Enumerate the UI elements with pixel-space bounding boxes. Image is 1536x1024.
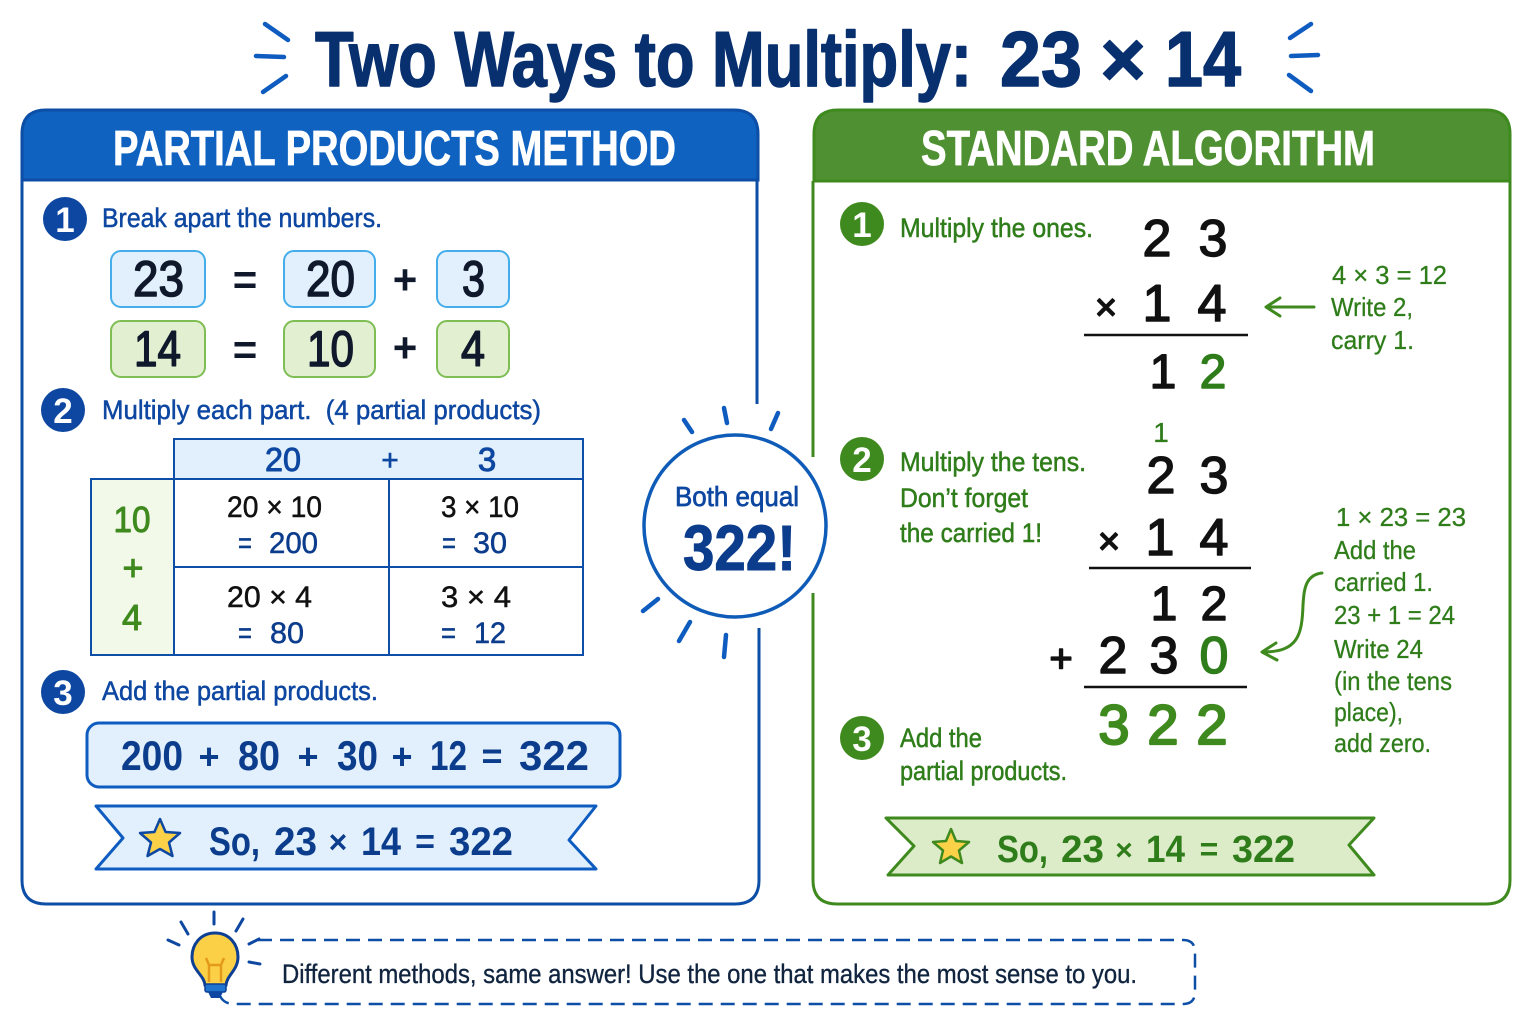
arrow: to ones note <box>1266 298 1314 316</box>
area model table <box>91 439 583 655</box>
sum box <box>87 723 620 787</box>
result text: 23 <box>1061 829 1104 871</box>
step 3 badge <box>840 716 884 760</box>
result text: 322 <box>1232 829 1295 871</box>
worked multiplication: ones: 1 <box>1143 275 1171 333</box>
step 3 text: partial products. <box>900 756 1067 786</box>
area model table: = <box>238 617 252 650</box>
worked multiplication: tens and total <box>1049 417 1251 756</box>
panel outline <box>813 181 1510 904</box>
worked multiplication: tens and total: 2 <box>1201 578 1227 631</box>
arrow: curved to tens row <box>1262 573 1322 660</box>
result text: 322 <box>449 820 513 864</box>
step 3 text <box>900 723 1067 786</box>
tip box <box>220 940 1195 1004</box>
area model table: 4 <box>122 597 142 638</box>
callout: both equal 322: Both equal <box>675 481 799 512</box>
step 1 text: Break apart the numbers. <box>102 203 382 233</box>
worked multiplication: tens and total: 2 <box>1147 693 1179 756</box>
result text: = <box>1200 831 1218 867</box>
step 1 badge <box>840 202 884 246</box>
area model table: 30 <box>473 527 507 560</box>
number boxes: 23 row: = <box>233 256 257 303</box>
number boxes: 14 row: 10 <box>307 321 354 377</box>
worked multiplication: tens and total: 3 <box>1150 627 1178 685</box>
step 2 badge: 2 <box>53 392 73 431</box>
sum box: 30 <box>337 732 378 779</box>
panel header: blue <box>22 110 758 180</box>
step 1 badge: 1 <box>852 206 872 245</box>
area model table: + <box>122 547 144 588</box>
worked multiplication: tens and total: 0 <box>1200 627 1228 685</box>
step 3 badge: 3 <box>53 674 73 713</box>
sum box: + <box>391 736 413 777</box>
note: tens <box>1334 502 1466 758</box>
area model table: + <box>381 444 399 477</box>
step 3 badge: 3 <box>852 720 872 759</box>
result text <box>209 820 513 864</box>
step 2 badge <box>41 388 85 432</box>
worked multiplication: ones: 2 <box>1200 346 1226 399</box>
icon: title sparks left <box>256 24 288 92</box>
callout: both equal 322 <box>644 435 826 617</box>
area model table: 3 × 10 <box>441 491 519 524</box>
result ribbon <box>96 806 596 869</box>
worked multiplication: ones: 4 <box>1198 275 1226 333</box>
number boxes: 14 row: + <box>393 324 417 371</box>
step 2 text <box>900 447 1086 548</box>
step 1 badge: 1 <box>55 201 75 240</box>
area model table: 200 <box>269 527 318 560</box>
note: tens: place), <box>1334 697 1403 727</box>
sum box: 12 <box>430 732 467 779</box>
worked multiplication: tens and total: 1 <box>1151 578 1177 631</box>
area model table: 3 × 4 <box>441 581 511 614</box>
panel header: green <box>814 110 1510 181</box>
panel: standard algorithm <box>813 110 1510 904</box>
step 2 text: Don’t forget <box>900 483 1028 513</box>
step 1 text: Multiply the ones. <box>900 213 1093 243</box>
number boxes: 14 row: = <box>233 326 257 373</box>
icon: star <box>140 819 180 856</box>
step 1 badge <box>43 197 87 241</box>
note: tens: 23 + 1 = 24 <box>1334 600 1455 630</box>
step 3 text: Add the partial products. <box>102 676 378 706</box>
note: ones <box>1331 260 1447 355</box>
heading: PARTIAL PRODUCTS METHOD <box>113 122 676 176</box>
area model table: 20 <box>265 441 301 478</box>
note: ones: 4 × 3 = 12 <box>1332 260 1447 290</box>
area model table: = <box>442 527 456 560</box>
note: tens: (in the tens <box>1334 666 1452 696</box>
number boxes: 14 row <box>111 321 509 377</box>
worked multiplication: ones <box>1084 210 1248 399</box>
worked multiplication: tens and total: 2 <box>1099 627 1127 685</box>
area model table: 20 × 10 <box>227 491 322 524</box>
step 2 badge <box>840 437 884 481</box>
worked multiplication: tens and total: + <box>1049 637 1073 681</box>
number boxes: 23 row: 23 <box>133 251 184 307</box>
number boxes: 14 row: 14 <box>134 321 181 377</box>
worked multiplication: tens and total: 2 <box>1147 447 1175 505</box>
panel: partial products method <box>22 110 759 904</box>
step 2 text: the carried 1! <box>900 518 1042 548</box>
number boxes: 23 row: 20 <box>306 251 355 307</box>
title: 14 <box>1165 15 1241 103</box>
title: Two Ways to Multiply: <box>315 15 972 103</box>
result text: So, <box>209 820 260 864</box>
title: 23 <box>1000 15 1082 103</box>
worked multiplication: tens and total: 4 <box>1200 509 1228 567</box>
area model table: 10 <box>114 499 150 540</box>
area model table: 3 <box>478 441 496 478</box>
step 3 badge <box>41 670 85 714</box>
number boxes: 23 row: 3 <box>462 251 485 307</box>
worked multiplication: tens and total: 3 <box>1200 447 1228 505</box>
icon: light bulb <box>168 912 260 998</box>
sum box: 80 <box>238 732 280 779</box>
area model table: 12 <box>474 617 506 650</box>
callout: both equal 322: 322! <box>683 512 796 584</box>
area model table: = <box>441 617 456 650</box>
worked multiplication: ones: 3 <box>1199 210 1227 268</box>
result text: × <box>1115 834 1133 867</box>
note: tens: Add the <box>1334 535 1416 565</box>
sum box: 322 <box>519 732 589 779</box>
step 2 badge: 2 <box>852 441 872 480</box>
result text: 14 <box>1146 829 1185 871</box>
worked multiplication: ones: × <box>1095 287 1117 329</box>
note: ones: Write 2, <box>1331 292 1413 322</box>
heading: STANDARD ALGORITHM <box>921 122 1375 176</box>
icon: title sparks right <box>1289 24 1318 91</box>
result text: So, <box>997 829 1048 871</box>
sum box: = <box>481 735 503 776</box>
worked multiplication: tens and total: 1 <box>1146 509 1174 567</box>
area model table: = <box>238 527 252 560</box>
icon: callout sparks <box>643 408 778 657</box>
result text: × <box>329 824 347 860</box>
worked multiplication: tens and total: 3 <box>1098 693 1130 756</box>
sum box: 200 <box>121 732 183 779</box>
number boxes: 14 row: 4 <box>461 321 485 377</box>
result text <box>997 829 1295 871</box>
icon: star <box>933 829 969 863</box>
area model table: 20 × 4 <box>227 581 312 614</box>
result ribbon <box>886 818 1374 875</box>
note: tens: add zero. <box>1334 728 1431 758</box>
step 2 text: Multiply each part. (4 partial products) <box>102 395 541 425</box>
number boxes: 23 row: + <box>393 256 417 303</box>
number boxes: 23 row <box>111 251 509 307</box>
step 3 text: Add the <box>900 723 982 753</box>
title: × <box>1100 15 1146 103</box>
step 2 text: Multiply the tens. <box>900 447 1086 477</box>
note: tens: carried 1. <box>1334 567 1433 597</box>
note: tens: 1 × 23 = 23 <box>1336 502 1466 532</box>
result text: = <box>415 823 435 861</box>
note: tens: Write 24 <box>1334 634 1423 664</box>
tip box: Different methods, same answer! Use the one that makes the most sense to you. <box>282 959 1137 989</box>
result text: 23 <box>274 820 317 864</box>
sum box: + <box>297 736 319 777</box>
worked multiplication: tens and total: × <box>1098 521 1120 563</box>
note: ones: carry 1. <box>1331 325 1414 355</box>
worked multiplication: ones: 1 <box>1150 346 1176 399</box>
worked multiplication: ones: 2 <box>1143 210 1171 268</box>
panel outline <box>22 180 759 904</box>
result text: 14 <box>361 820 402 864</box>
sum box: + <box>198 736 220 777</box>
worked multiplication: tens and total: 2 <box>1196 693 1228 756</box>
worked multiplication: tens and total: 1 <box>1153 417 1169 448</box>
area model table: 80 <box>270 617 304 650</box>
